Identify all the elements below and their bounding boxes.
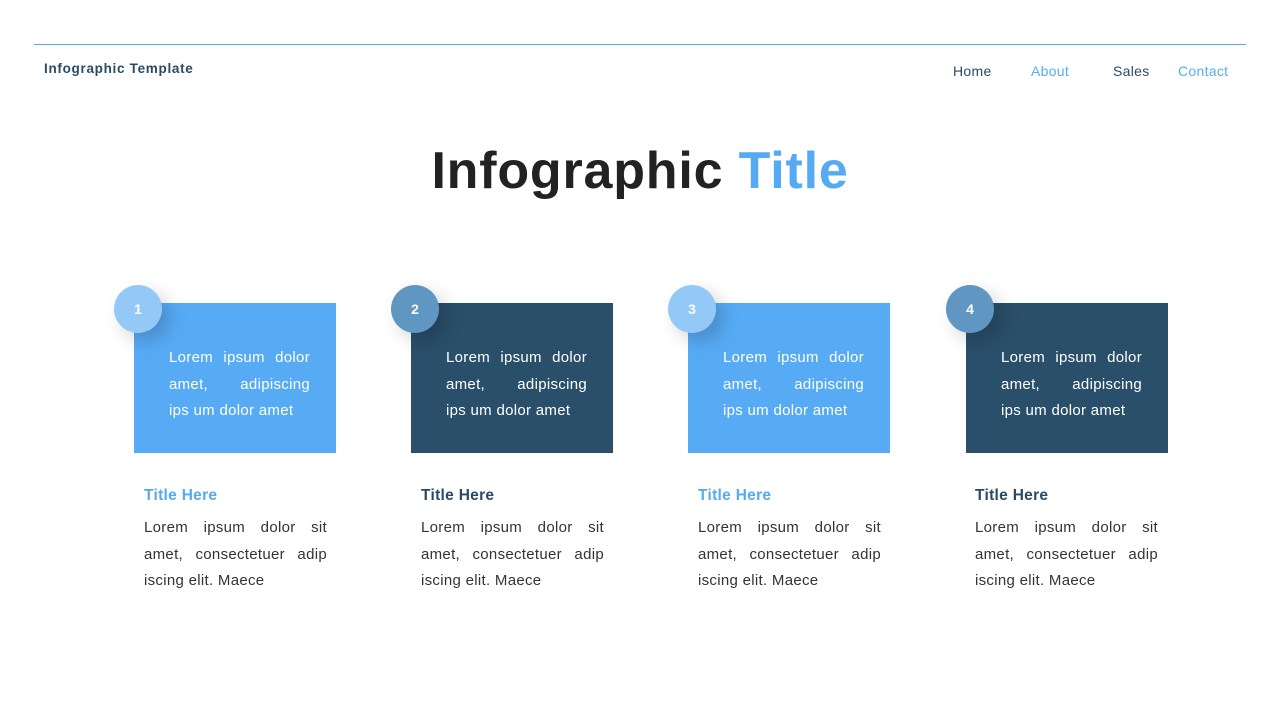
box 4: Lorem ipsum dolor [1001, 349, 1142, 366]
body 2: Lorem ipsum dolor sit [421, 519, 604, 536]
body 4: Lorem ipsum dolor sit [975, 519, 1158, 536]
circle 3: 3 [688, 301, 696, 317]
body 3: Lorem ipsum dolor sit [698, 519, 881, 536]
title 1: Title Here [144, 487, 217, 504]
title 4: Title Here [975, 487, 1048, 504]
box 4 [966, 303, 1168, 453]
circle 3 [668, 285, 716, 333]
body 2: amet, consectetuer adip [421, 546, 604, 562]
title 2: Title Here [421, 487, 494, 504]
body 3: iscing elit. Maece [698, 572, 818, 589]
card 3 [668, 285, 890, 589]
card 4 [946, 285, 1168, 589]
box 2: amet, adipiscing [446, 376, 587, 392]
body 1: iscing elit. Maece [144, 572, 264, 589]
card 1 [114, 285, 336, 589]
circle 4 [946, 285, 994, 333]
body 2 [421, 519, 604, 589]
box 4: amet, adipiscing [1001, 376, 1142, 392]
box 3 [688, 303, 890, 453]
body 3 [698, 519, 881, 589]
box 3: ips um dolor amet [723, 402, 847, 419]
box 2 [411, 303, 613, 453]
circle 2: 2 [411, 301, 419, 317]
box 4: ips um dolor amet [1001, 402, 1125, 419]
box 1: ips um dolor amet [169, 402, 293, 419]
title 3: Title Here [698, 487, 771, 504]
title: Infographic Title [431, 142, 849, 200]
brand: Infographic Template [44, 61, 194, 76]
card 2 [391, 285, 613, 589]
body 1 [144, 519, 327, 589]
body 4: iscing elit. Maece [975, 572, 1095, 589]
box 3: amet, adipiscing [723, 376, 864, 392]
box 1 [134, 303, 336, 453]
nav: home: Home [953, 63, 992, 79]
box 1: amet, adipiscing [169, 376, 310, 392]
box 1: Lorem ipsum dolor [169, 349, 310, 366]
body 2: iscing elit. Maece [421, 572, 541, 589]
body 4: amet, consectetuer adip [975, 546, 1158, 562]
box 3: Lorem ipsum dolor [723, 349, 864, 366]
body 1: Lorem ipsum dolor sit [144, 519, 327, 536]
circle 1: 1 [134, 301, 142, 317]
header line [34, 44, 1246, 45]
nav: sales: Sales [1113, 63, 1150, 79]
body 4 [975, 519, 1158, 589]
body 1: amet, consectetuer adip [144, 546, 327, 562]
circle 4: 4 [966, 301, 974, 317]
circle 1 [114, 285, 162, 333]
nav: contact: Contact [1178, 63, 1228, 79]
box 2: Lorem ipsum dolor [446, 349, 587, 366]
nav: about: About [1031, 63, 1069, 79]
circle 2 [391, 285, 439, 333]
box 2: ips um dolor amet [446, 402, 570, 419]
body 3: amet, consectetuer adip [698, 546, 881, 562]
